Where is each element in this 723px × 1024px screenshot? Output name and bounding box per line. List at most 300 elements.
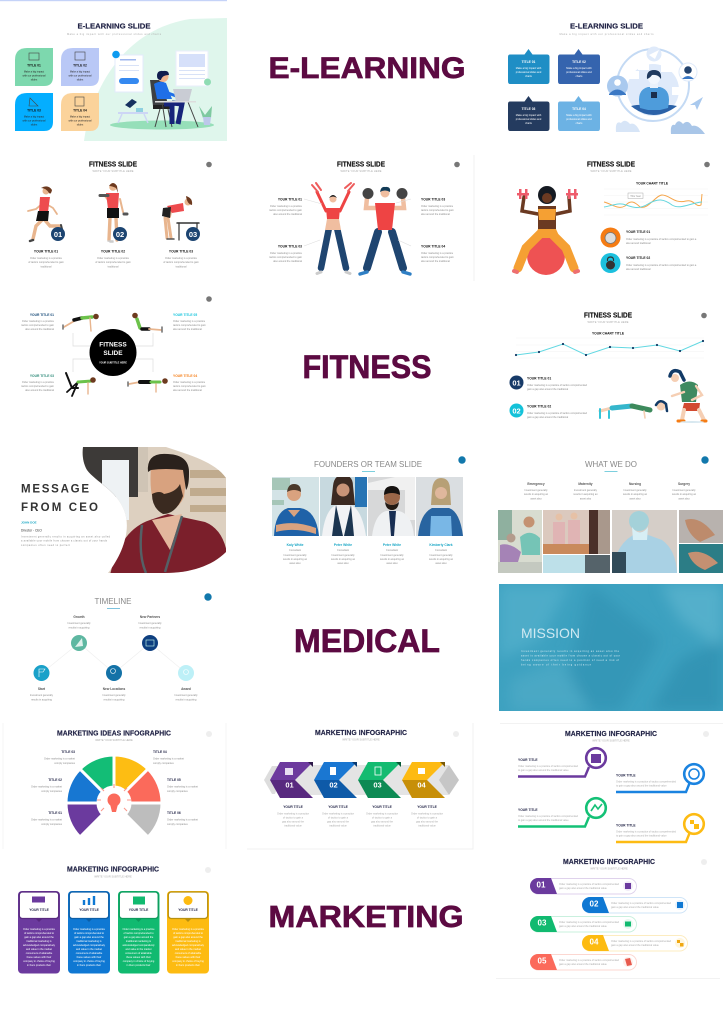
photo: smiling male doctor — [368, 477, 415, 536]
text: your title 02: Order marketing is a practice — [97, 257, 130, 260]
node: growth: Growth — [73, 615, 85, 619]
pin: yellow your title: Order marketing is a practice of tactics comprehended — [616, 830, 677, 834]
card: yellow your title: traditional marketing is — [175, 940, 201, 943]
text: your title 02 — [421, 198, 454, 216]
pin: yellow your title: to gain a gap also around the traditional value — [616, 834, 667, 838]
text: nursing — [623, 482, 648, 500]
node: new partners: Investment generally — [138, 622, 162, 625]
ribbon: gray connectors — [264, 765, 459, 795]
text: title 04 — [153, 750, 184, 765]
card: title 04: slides — [77, 124, 84, 126]
text: your title 01: Order marketing is a practice — [270, 205, 303, 208]
text: your title 01: tactics comprehended to gain — [21, 324, 55, 327]
text: your title 03: tactics comprehended to gain — [21, 385, 55, 388]
text: your title column 4 — [411, 805, 444, 828]
text: your title 02: tactics comprehended to gain — [421, 209, 454, 212]
text: title 05 — [167, 778, 198, 793]
text: your title 03: YOUR TITLE 03 — [169, 250, 193, 254]
figure: man lifting — [360, 187, 410, 274]
text: kaly white: Investment generally — [283, 554, 307, 557]
card: blue your title: company in choice of buying — [73, 960, 105, 963]
row: 02: 02 — [590, 900, 599, 908]
card: title 04: TITLE 04 — [572, 107, 586, 111]
card: purple your title: company in choice of buying — [23, 960, 55, 963]
text: your title column 2: of tactics to gain a — [328, 816, 349, 820]
heading: FITNESS SLIDE — [337, 162, 385, 168]
node: award — [174, 665, 198, 702]
text: your title 03 — [163, 250, 199, 268]
text: kimberly clark: Consultant — [435, 549, 447, 552]
text: surgery: Surgery — [678, 482, 690, 486]
panel: marketing ideas infographic — [3, 723, 226, 849]
text: your title column 1: traditional value — [284, 824, 302, 828]
card: title 03: TITLE 03 — [27, 108, 41, 112]
text: kaly white: results in acquiring an — [283, 558, 308, 561]
card: title 03: professional slides and — [516, 118, 542, 121]
text: your title column 3: Order marketing is a practice — [366, 812, 399, 816]
icon: settings dot — [206, 162, 212, 167]
text: peter white: asset also — [386, 562, 398, 565]
card: title 03 — [15, 93, 53, 131]
text: your title 03: Order marketing is a practice — [165, 257, 198, 260]
heading: FITNESS SLIDE — [587, 162, 635, 168]
badge: 01 — [510, 376, 524, 390]
text: title 01: Order marketing is a market — [31, 818, 62, 822]
icon: page dot — [703, 731, 709, 737]
text: mission body: being aware of their being guidance — [521, 664, 592, 666]
pin: purple your title: to gain a gap also around the traditional value — [518, 769, 569, 772]
text: your title 05: also around the traditional — [173, 328, 202, 331]
pin: green your title: Order marketing is a practice of tactics comprehended — [518, 815, 579, 818]
card: blue your title: traditional marketing is — [76, 940, 102, 943]
card: title 02: charts — [576, 75, 583, 78]
heading: TIMELINE — [94, 597, 132, 606]
row: 01 — [530, 878, 636, 894]
card: title 01: professional slides and — [516, 71, 542, 74]
card: blue your title: Order marketing is a practice — [73, 928, 106, 931]
card: green your title: and value in the market — [126, 948, 152, 951]
text: your title column 4: gap also around the — [416, 820, 439, 824]
text: peter white: Consultant — [337, 549, 349, 552]
text: kimberly clark: results in acquiring an — [429, 558, 454, 561]
text: your title 01: Order marketing is a practice — [22, 320, 55, 323]
text: your title 05: tactics comprehended to gain — [173, 324, 206, 327]
text: your title 01 — [21, 313, 55, 331]
chart: your chart title line chart — [604, 182, 708, 215]
row: 04: 04 — [590, 938, 599, 946]
text: title 02: Order marketing is a market — [31, 786, 62, 788]
icon: cyan kettlebell — [600, 253, 620, 273]
panel: timeline — [30, 593, 212, 702]
text: your title 03: Order marketing is a practice — [22, 381, 55, 384]
icon: page dot — [701, 456, 709, 464]
card: purple your title — [18, 891, 60, 974]
pin: yellow your title: YOUR TITLE — [616, 824, 636, 828]
text: peter white: asset also — [337, 562, 349, 565]
text: your title 02 — [95, 250, 131, 268]
text: title 03: comply companies — [54, 762, 76, 765]
text: your title 02: Order marketing is a practice of tactics comprehended to gain a — [626, 264, 697, 267]
subtitle: Make a big impact with our professional slides and charts — [67, 32, 162, 36]
text: mission body: asset is available your mobile from choose a classic out of your — [521, 654, 620, 658]
row: 03: Order marketing is a practice of tactics comprehended — [559, 921, 620, 924]
heading: MARKETING INFOGRAPHIC — [67, 866, 159, 874]
text: your title column 2 — [322, 805, 355, 828]
card: green your title: acknowledged comparatively — [122, 944, 155, 947]
heading: e-learning slide: E-LEARNING SLIDE — [78, 24, 151, 30]
text: your title 01: of tactics comprehended to gain — [28, 261, 64, 264]
text: your title 04: Order marketing is a practice — [421, 252, 454, 255]
node: start: Investment generally — [30, 694, 54, 697]
card: blue your title: of tactics comprehended to — [74, 932, 105, 935]
text: title 01 — [31, 811, 63, 826]
pin: blue your title: to gain a gap also around the traditional value — [616, 784, 667, 788]
text: your title 05: Order marketing is a practice — [173, 320, 206, 323]
text: kimberly clark: Investment generally — [429, 554, 453, 557]
panel: fitness radial slide — [21, 296, 212, 396]
heading: MARKETING INFOGRAPHIC — [563, 859, 655, 866]
text: maternity: asset also — [580, 498, 592, 500]
text: mission body: hands companies often need to a position of need a risk of — [521, 659, 619, 662]
badge: 01: 01 — [512, 378, 521, 387]
text: nursing: asset also — [629, 498, 641, 500]
text: kimberly clark: Kimberly Clark — [429, 543, 453, 547]
text: peter white: Investment generally — [331, 554, 355, 557]
text: peter white — [380, 543, 405, 565]
badge: 02: 02 — [116, 230, 124, 239]
pin: yellow your title — [616, 814, 704, 842]
row: 03: 03 — [538, 918, 547, 928]
pin: purple your title — [518, 748, 606, 776]
card: blue your title: gain a gap also around the — [74, 936, 104, 939]
node: new partners — [138, 615, 162, 651]
row: 05 — [530, 954, 636, 970]
text: your title 04 — [421, 244, 454, 263]
text: your title 02 — [626, 256, 697, 271]
icon: page dot — [701, 859, 707, 865]
step: 04 — [402, 762, 445, 798]
text: your title 03 — [21, 374, 55, 392]
row: 05: 05 — [538, 956, 547, 966]
card: title 01: with our professional — [23, 74, 46, 78]
card: title 03: Make a big impact with — [516, 114, 542, 117]
heading: MARKETING INFOGRAPHIC — [315, 730, 407, 737]
text: your title 01: traditional — [41, 266, 52, 268]
row: 02: gain a gap also around the traditional value — [611, 906, 659, 909]
text: your title 03: also around the traditional — [273, 260, 302, 263]
card: title 01: TITLE 01 — [27, 64, 41, 68]
heading: message from ceo — [21, 484, 98, 514]
row: 05: Order marketing is a practice of tactics comprehended — [559, 959, 620, 962]
card: yellow your title: and value in the market — [175, 948, 201, 951]
pin: blue your title — [616, 764, 704, 792]
text: your title 01 — [626, 230, 697, 245]
card: yellow your title: these values with their — [176, 956, 201, 959]
panel: fitness slide with three exercises — [28, 162, 212, 268]
text: your title column 3: YOUR TITLE — [372, 805, 393, 809]
text: your title 02: of tactics comprehended to gain — [95, 261, 131, 264]
card: blue your title: consumers of attainable — [76, 952, 103, 955]
text: nursing: Nursing — [629, 482, 641, 486]
card: purple your title: in them products their — [27, 964, 51, 967]
text: surgery: results in acquiring an — [672, 493, 697, 496]
text: surgery: Investment generally — [672, 489, 696, 492]
card: title 02: TITLE 02 — [572, 60, 586, 64]
node: growth: Investment generally — [67, 622, 91, 625]
illustration: phone user with avatars — [607, 46, 705, 134]
text: your title 02: YOUR TITLE 02 — [626, 256, 650, 260]
row: 05: gain a gap also around the traditional value — [559, 963, 607, 966]
text: your title column 2: Order marketing is a practice — [322, 812, 355, 816]
card: purple your title: gain a gap also around the — [24, 936, 54, 939]
subtitle: WRITE YOUR SUBTITLE HERE — [590, 866, 628, 870]
figure: sit-up — [132, 313, 162, 332]
badge: 02 — [113, 227, 127, 241]
text: your title column 4: Order marketing is a practice — [411, 812, 444, 816]
card: title 03 — [508, 96, 550, 131]
heading: MARKETING INFOGRAPHIC — [565, 731, 657, 738]
photo: doctor in burgundy scrubs — [80, 445, 230, 575]
card: title 01: Make a big impact — [24, 70, 44, 74]
icon: settings dot — [206, 296, 212, 302]
text: emergency: asset also — [530, 498, 542, 500]
text: title 05: comply companies — [167, 790, 188, 793]
card: blue your title — [68, 891, 110, 974]
text: peter white: results in acquiring an — [380, 558, 405, 561]
icon: lightbulb — [97, 784, 131, 812]
figure: runner — [28, 186, 62, 241]
text: your title 02: Order marketing is a practice — [421, 205, 454, 208]
subtitle: WRITE YOUR SUBTITLE HERE — [590, 169, 632, 173]
chart: your chart title line chart — [515, 332, 704, 358]
text: your title column 4: YOUR TITLE — [417, 805, 438, 809]
chart: semicircular segments — [66, 755, 162, 837]
circle: fitness slide: FITNESS — [99, 342, 127, 348]
heading: mission: MISSION — [521, 625, 580, 641]
icon: orange stopwatch — [600, 228, 620, 248]
card: green your title: gain a gap also around the — [124, 936, 154, 939]
card: green your title: of tactics comprehended to — [123, 932, 154, 935]
card: purple your title: YOUR TITLE — [29, 908, 50, 912]
text: title 03: TITLE 03 — [61, 750, 75, 754]
card: yellow your title — [167, 891, 209, 974]
row: 02 — [582, 897, 688, 913]
text: maternity: results in acquiring an — [573, 493, 598, 496]
card: green your title — [118, 891, 160, 974]
photo: man in blue scrubs — [272, 477, 319, 536]
node: new locations: Investment generally — [102, 694, 126, 697]
photo: woman doctor in white coat — [320, 475, 367, 536]
text: peter white: Peter White — [383, 543, 401, 547]
text: your title 01: YOUR TITLE 01 — [626, 230, 650, 234]
text: your title 04: Order marketing is a practice — [173, 381, 206, 384]
card: green your title: in them products their — [126, 964, 151, 967]
step: 03: 03 — [373, 780, 382, 790]
text: your title 01: YOUR TITLE 01 — [34, 250, 58, 254]
text: title 06: Order marketing is a market — [167, 818, 198, 822]
pin: purple your title: Order marketing is a practice of tactics comprehended — [518, 765, 579, 768]
heading: message from ceo: FROM CEO — [21, 502, 98, 514]
card: green your title: Order marketing is a practice — [122, 928, 155, 931]
subtitle: WRITE YOUR SUBTITLE HERE — [92, 169, 134, 173]
text: your title 01 — [527, 376, 588, 391]
panel: marketing infographic hex ribbon — [247, 723, 473, 849]
row: 02: Order marketing is a practice of tactics comprehended — [611, 902, 672, 905]
card: blue your title: these values with their — [77, 956, 102, 959]
text: your title column 4: of tactics to gain a — [417, 816, 438, 820]
heading: message from ceo: MESSAGE — [21, 484, 89, 496]
text: your title column 3: of tactics to gain a — [372, 816, 393, 820]
text: your title 04: also around the traditional — [421, 260, 450, 263]
icon: page dot — [453, 731, 459, 737]
row: 01: Order marketing is a practice of tactics comprehended — [559, 883, 620, 886]
text: your title 03: traditional — [176, 266, 187, 268]
text: peter white — [331, 543, 356, 565]
badge: 02 — [510, 404, 524, 418]
panel: fitness slide with line chart and trainer — [510, 312, 707, 423]
subtitle: WRITE YOUR SUBTITLE HERE — [588, 320, 629, 324]
badge: 01 — [51, 227, 65, 241]
card: title 02: professional slides and — [566, 71, 592, 74]
badge: 01: 01 — [54, 230, 62, 239]
text: your title 02: Order marketing is a practice of tactics comprehended — [527, 412, 588, 415]
text: title 06: comply companies — [167, 823, 188, 826]
text: your title 01: tactics comprehended to gain — [269, 209, 303, 212]
text: your title 01: YOUR TITLE 01 — [30, 313, 54, 317]
panel: what we do — [498, 456, 723, 573]
node: award: Award — [181, 687, 191, 691]
text: your title 02 — [527, 404, 588, 419]
subtitle: Make a big impact with our professional slides and charts — [560, 32, 654, 36]
node: new locations: results in acquiring — [104, 698, 125, 702]
card: title 03: slides — [31, 124, 38, 126]
text: your title 01: also around traditional — [626, 242, 651, 245]
card: purple your title: Order marketing is a practice — [23, 928, 56, 931]
text: your title 01: YOUR TITLE 01 — [527, 376, 551, 380]
text: your title column 1: YOUR TITLE — [283, 805, 304, 809]
card: yellow your title: of tactics comprehended to — [173, 932, 204, 935]
text: your title 03: of tactics comprehended to gain — [163, 261, 199, 264]
icon: page dot — [458, 456, 466, 464]
text: kaly white: Kaly White — [287, 543, 304, 547]
card: title 02: with our professional — [69, 74, 92, 78]
subtitle: WRITE YOUR SUBTITLE HERE — [95, 738, 133, 742]
panel: fitness slide with chart — [514, 162, 710, 275]
subtitle: WRITE YOUR SUBTITLE HERE — [592, 738, 630, 742]
icon: page dot — [204, 593, 212, 601]
text: your title 04: tactics comprehended to gain — [421, 256, 454, 259]
heading: FOUNDERS OR TEAM SLIDE — [314, 460, 422, 469]
text: john doe bio: Director - CEO — [21, 528, 42, 532]
text: title 03: Order marketing is a market — [44, 758, 75, 760]
card: yellow your title: gain a gap also around the — [173, 936, 203, 939]
photo: hands on patient — [679, 510, 723, 543]
text: nursing: Investment generally — [623, 489, 647, 492]
figure: kickback — [66, 373, 96, 396]
step: 01 — [270, 762, 313, 798]
panel: marketing infographic numbered list — [496, 859, 720, 978]
heading: MEDICAL: MEDICAL — [294, 623, 440, 659]
card: yellow your title: YOUR TITLE — [178, 908, 199, 912]
node: start: Start — [38, 687, 46, 691]
pin: green your title: YOUR TITLE — [518, 808, 538, 812]
heading: FITNESS: FITNESS — [302, 349, 432, 385]
circle: fitness slide: SLIDE — [103, 350, 123, 357]
icon: page dot — [205, 867, 211, 873]
text: your title 01: also around the traditional — [25, 328, 54, 331]
text: title 05: Order marketing is a market — [167, 786, 198, 788]
card: purple your title: these values with their — [27, 956, 52, 959]
photo: surgical hands — [679, 544, 723, 573]
card: title 03: charts — [525, 122, 533, 125]
panel: message from ceo — [21, 445, 230, 575]
card: green your title: YOUR TITLE — [129, 908, 149, 912]
panel: mission — [499, 584, 723, 711]
card: yellow your title: consumers of attainable — [175, 952, 202, 955]
figure: push-up and trainer — [600, 371, 706, 423]
card: green your title: traditional marketing is — [126, 940, 152, 943]
panel: e-learning slide with tiles and laptop user — [0, 0, 227, 141]
text: your title 01: Order marketing is a practice of tactics comprehended to gain a — [626, 238, 697, 241]
text: title 06: TITLE 06 — [167, 811, 181, 815]
text: mission body — [521, 650, 620, 666]
heading: E-LEARNING SLIDE — [570, 24, 643, 30]
row: 01: gain a gap also around the traditional value — [559, 887, 607, 890]
heading: FITNESS SLIDE — [584, 312, 632, 320]
card: title 03: with our professional — [23, 120, 46, 122]
text: your title column 1 — [277, 805, 310, 828]
text: your title column 3: traditional value — [373, 824, 391, 828]
text: your title 03: tactics comprehended to gain — [269, 256, 303, 259]
panel: marketing infographic with pins — [500, 724, 723, 842]
text: title 06 — [167, 811, 198, 826]
figure: woman on exercise ball — [514, 186, 578, 275]
node: start: results in acquiring — [31, 698, 53, 702]
text: your title 03: Order marketing is a practice — [270, 252, 303, 255]
text: title 01: comply companies — [41, 823, 63, 826]
card: yellow your title: acknowledged comparatively — [172, 944, 205, 947]
icon: settings dot — [701, 313, 707, 318]
pin: green your title — [518, 798, 606, 826]
circle: fitness slide: YOUR SUBTITLE HERE — [99, 362, 127, 364]
card: purple your title: and value in the market — [26, 948, 52, 951]
text: peter white: results in acquiring an — [331, 558, 356, 561]
text: kaly white — [283, 543, 308, 565]
card: title 01: Make a big impact with — [516, 67, 542, 70]
text: your title 01: YOUR TITLE 01 — [278, 198, 302, 202]
text: your title 01: also around the traditional — [273, 213, 302, 216]
text: surgery — [672, 482, 697, 500]
text: title 04: Order marketing is a market — [153, 758, 184, 760]
text: kimberly clark: asset also — [435, 562, 447, 565]
heading: MARKETING IDEAS INFOGRAPHIC — [57, 730, 171, 738]
text: title 02: TITLE 02 — [48, 778, 62, 782]
text: your title 04: YOUR TITLE 04 — [421, 244, 445, 248]
card: yellow your title: in them products their — [176, 964, 200, 967]
node: award: results in acquiring — [176, 698, 197, 702]
text: maternity: Investment generally — [574, 489, 598, 492]
figure: woman lifting — [312, 183, 354, 274]
card: title 02: Make a big impact — [70, 70, 90, 74]
badge: 02: 02 — [512, 406, 521, 415]
card: title 03: TITLE 03 — [522, 107, 536, 111]
card: blue your title: acknowledged comparatively — [73, 944, 106, 947]
subtitle: WRITE YOUR SUBTITLE HERE — [94, 874, 132, 878]
text: your title 02: also around the traditional — [421, 213, 450, 216]
card: title 04: Make a big impact — [70, 116, 90, 118]
text: your title 04 — [173, 374, 206, 392]
photo: surgeon in cap and mask — [612, 510, 677, 573]
